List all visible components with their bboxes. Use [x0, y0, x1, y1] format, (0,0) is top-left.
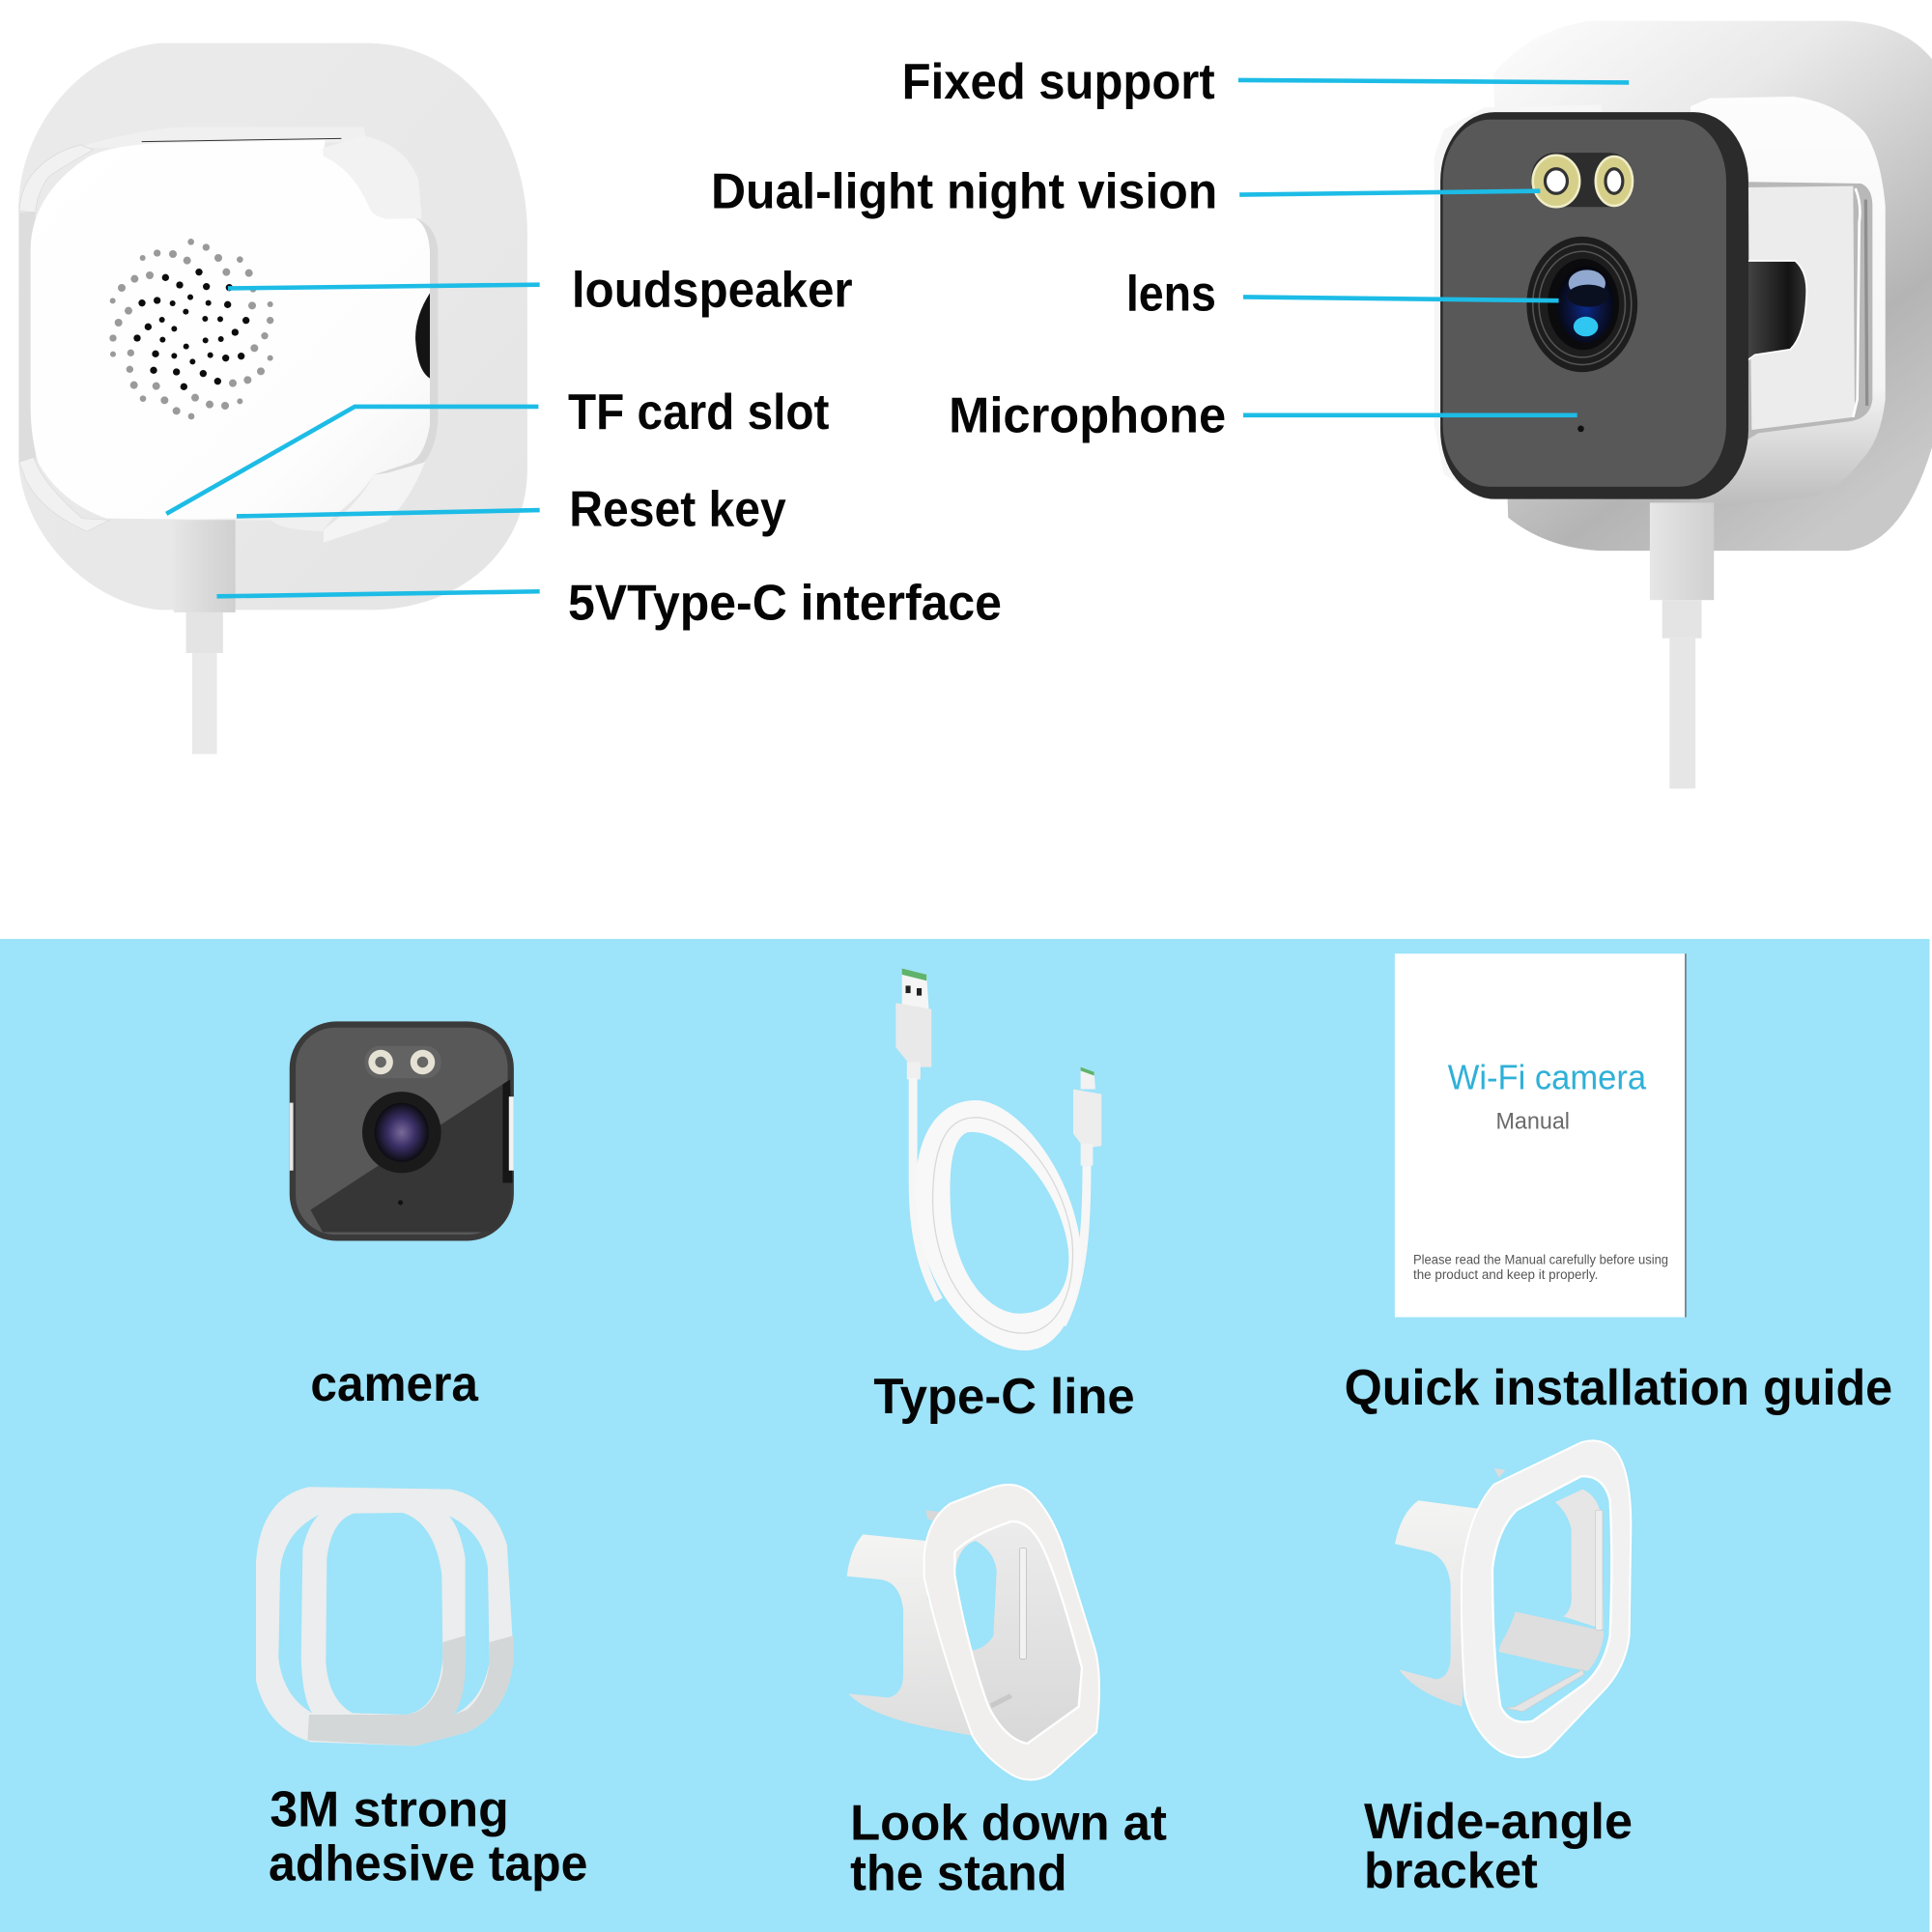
Type-C plug [1073, 1067, 1101, 1166]
feature labels: lens [1126, 266, 1216, 322]
panel: package contents [0, 939, 1929, 1932]
clip: bottom right [324, 462, 425, 543]
bracket arm [1395, 1500, 1478, 1707]
item: Type-C cable [895, 969, 1101, 1350]
bracket shelf [1499, 1611, 1604, 1671]
TF card slot cover [415, 293, 430, 379]
product: back view of camera in mount [18, 43, 527, 754]
item: quick guide booklet: Please read the Manual carefully before using [1413, 1253, 1668, 1267]
item: quick guide booklet: Wi-Fi camera [1448, 1059, 1646, 1097]
clip: top right [323, 136, 422, 219]
mount and rear body [19, 128, 438, 543]
power connector and cable [1650, 502, 1714, 788]
item: quick guide booklet: the product and keep it properly. [1413, 1267, 1598, 1282]
feature labels: Dual-light night vision [711, 164, 1217, 220]
item labels [269, 1356, 1892, 1902]
stand rib [1020, 1548, 1026, 1659]
lens [1526, 237, 1637, 372]
frame: right edge [374, 218, 438, 475]
device face [1443, 120, 1726, 487]
item: adhesive tape rings [256, 1487, 514, 1746]
item: quick guide booklet [1395, 953, 1687, 1318]
feature labels: TF card slot [568, 384, 829, 440]
back plate [18, 43, 527, 610]
feature labels: loudspeaker [572, 263, 853, 319]
back plate [1493, 21, 1932, 551]
feature labels: Fixed support [902, 54, 1215, 110]
product: front view of camera in mount [1435, 21, 1932, 788]
mount clips left [1435, 104, 1602, 499]
item labels: Type-C line [873, 1369, 1135, 1425]
bracket opening [1492, 1476, 1611, 1722]
item: quick guide booklet: Manual [1495, 1108, 1570, 1134]
power connector and cable [174, 520, 236, 754]
callout lines [166, 80, 1629, 596]
item: camera [290, 1021, 514, 1240]
item labels: Look down at [850, 1795, 1167, 1851]
mount frame right [1690, 97, 1886, 512]
bracket back wall [1555, 1490, 1604, 1630]
item labels: Wide-angle [1364, 1794, 1633, 1850]
microphone hole [1577, 426, 1584, 432]
cable coil [913, 1078, 1087, 1350]
USB plug [895, 969, 931, 1079]
bracket plate [1462, 1440, 1631, 1757]
item labels: adhesive tape [269, 1835, 587, 1891]
feature labels: Reset key [569, 482, 786, 538]
camera rear body [31, 140, 430, 520]
item labels: the stand [850, 1846, 1067, 1902]
stand strut [990, 1693, 1012, 1708]
stand opening wall [954, 1521, 1082, 1744]
dark slot [1747, 261, 1806, 360]
device body [1440, 112, 1748, 499]
item: look-down stand [847, 1485, 1099, 1780]
feature labels [568, 54, 1226, 632]
item labels: bracket [1364, 1843, 1538, 1899]
stand see-through [955, 1541, 997, 1650]
feature labels: 5VType-C interface [568, 576, 1002, 632]
item labels: Quick installation guide [1345, 1360, 1892, 1416]
stand arm [847, 1534, 973, 1736]
bracket rib [1596, 1510, 1603, 1630]
item: wide-angle bracket [1395, 1440, 1631, 1757]
dual lights [1531, 153, 1633, 207]
loudspeaker grille [109, 239, 273, 419]
bracket lower rib [1505, 1669, 1584, 1712]
clip: bottom left [19, 457, 109, 531]
bracket pin [1494, 1468, 1505, 1478]
item labels: 3M strong [270, 1781, 509, 1837]
stand plate [924, 1485, 1099, 1780]
clip: top left [19, 145, 94, 213]
feature labels: Microphone [949, 388, 1226, 444]
item labels: camera [310, 1356, 479, 1412]
stand pin [925, 1510, 940, 1521]
